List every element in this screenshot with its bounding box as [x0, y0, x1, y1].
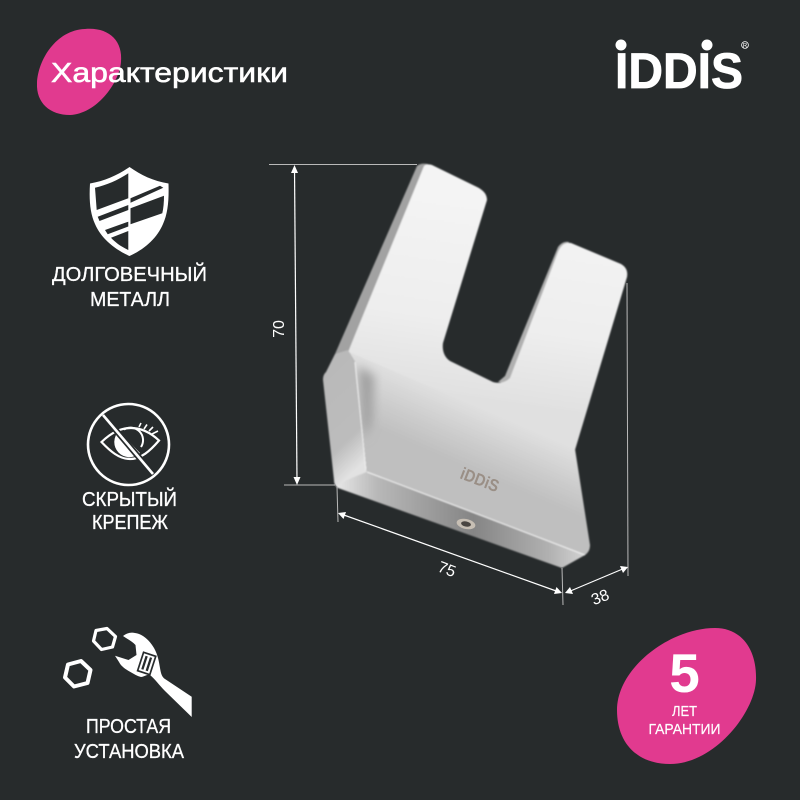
label: durable metal: МЕТАЛЛ	[90, 289, 170, 311]
warranty text: ЛЕТ	[672, 704, 697, 720]
icon: crossed eye	[88, 404, 169, 485]
right prong inner side	[498, 242, 569, 384]
top face	[348, 164, 627, 450]
dimension: depth 38: 38	[589, 587, 612, 609]
feature: easy install	[65, 628, 192, 763]
dimension: depth 38	[565, 283, 628, 609]
brand logo: R	[743, 44, 748, 50]
label: durable metal	[52, 262, 207, 311]
icon: wrench and nuts	[65, 628, 192, 717]
panel highlight	[355, 362, 585, 555]
product: wall hook	[323, 164, 627, 568]
dimension: width 75: 75	[435, 559, 458, 581]
icon: shield	[90, 167, 169, 256]
bottom face	[337, 472, 585, 568]
label: hidden fastening	[82, 487, 177, 534]
label: easy install	[74, 716, 185, 763]
dimension: width 75	[337, 487, 563, 605]
warranty text	[648, 704, 720, 738]
main front panel	[349, 352, 590, 555]
warranty text: ГАРАНТИИ	[648, 722, 720, 738]
feature: hidden fastening	[82, 404, 177, 534]
left prong side	[335, 164, 428, 354]
label: easy install: ПРОСТАЯ	[86, 716, 171, 738]
brand logo: IDDIS	[615, 43, 743, 99]
label: hidden fastening: СКРЫТЫЙ	[82, 487, 177, 511]
left chamfer	[323, 350, 367, 488]
product logo: iDDiS	[458, 464, 502, 496]
warranty number: 5	[669, 642, 700, 704]
badge pink blob	[617, 628, 756, 764]
label: durable metal: ДОЛГОВЕЧНЫЙ	[52, 262, 207, 286]
feature: durable metal	[52, 167, 207, 311]
warranty badge	[617, 628, 756, 764]
dimension: height 70: 70	[271, 320, 288, 338]
panel left shadow	[358, 366, 374, 440]
label: easy install: УСТАНОВКА	[74, 741, 185, 763]
title pink blob	[37, 29, 121, 115]
fixing screw	[456, 517, 476, 531]
title	[37, 29, 288, 115]
label: hidden fastening: КРЕПЕЖ	[92, 512, 168, 534]
title text: Характеристики	[51, 57, 288, 88]
dimension: height 70	[269, 164, 417, 485]
